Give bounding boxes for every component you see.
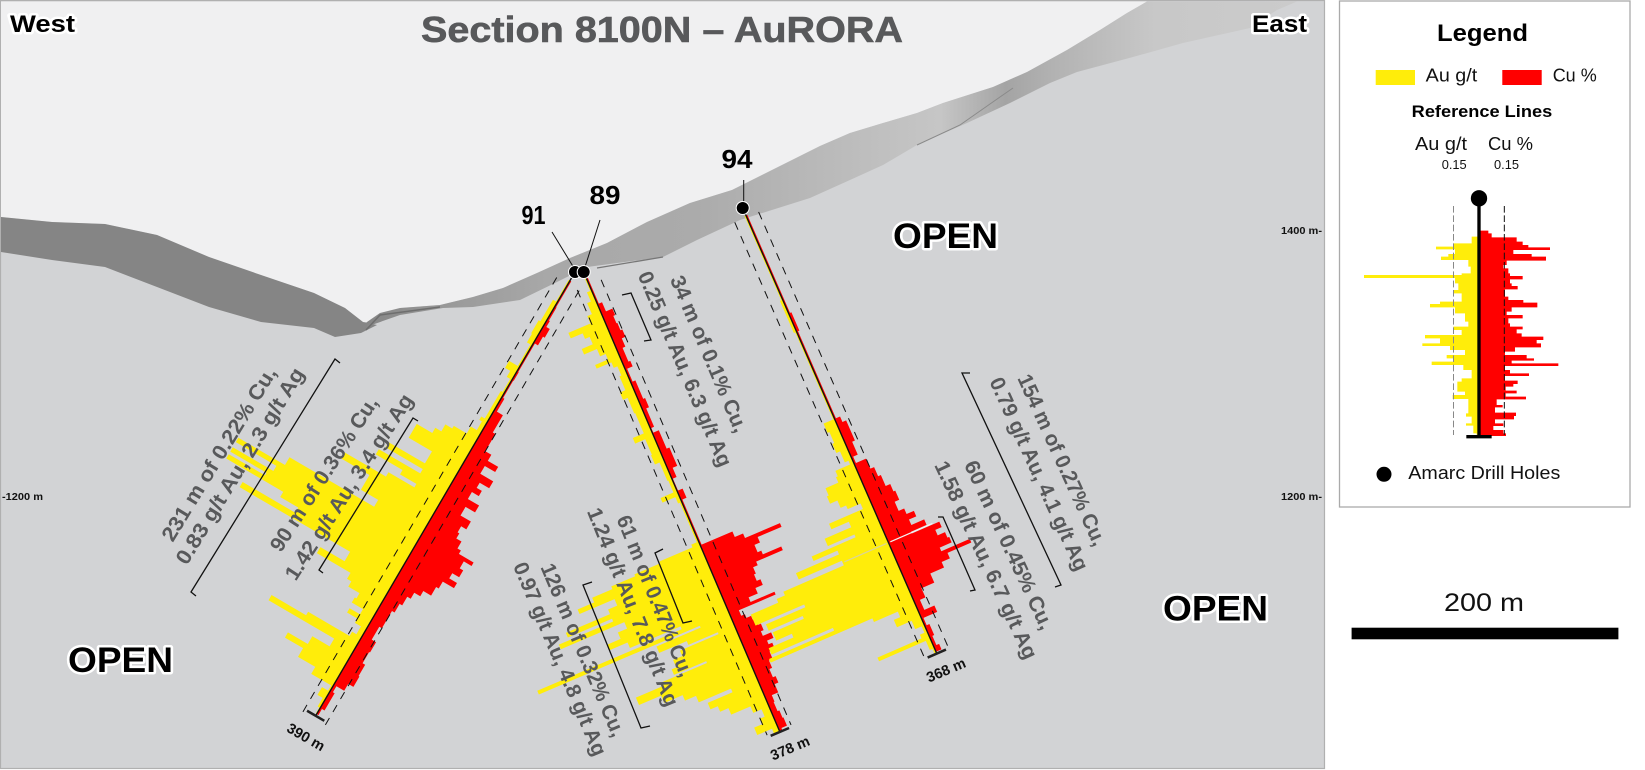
depth label 390 m: 390 m — [284, 721, 327, 755]
icon: drill hole marker — [1376, 467, 1392, 482]
bracket: 34 m interval — [622, 293, 651, 341]
callout: 154 m intercept: 154 m of 0.27% Cu, — [1013, 371, 1111, 550]
label: East: East — [1252, 11, 1307, 38]
terrain: east band — [360, 2, 1297, 331]
hole number 89: 89 — [590, 180, 620, 210]
hole 94 Au bars — [603, 215, 936, 715]
scale label: 200 m — [1444, 589, 1524, 617]
hole 91 Au bars — [138, 176, 570, 714]
hole 94 Cu bars — [746, 185, 1006, 652]
label: OPEN upper: OPEN — [893, 217, 998, 256]
hole collars and numbers — [522, 144, 753, 278]
reference lines heading: Reference Lines — [1412, 102, 1552, 121]
reference: Cu %: Cu % — [1488, 134, 1533, 154]
callout: 60 m intercept: 60 m of 0.45% Cu, — [959, 457, 1058, 633]
key text: Au g/t: Au g/t — [1426, 66, 1477, 86]
reference value Cu: 0.15 — [1494, 157, 1519, 172]
callout: 90 m intercept: 90 m of 0.36% Cu, — [266, 393, 383, 556]
hole 89 Cu bars — [586, 244, 855, 731]
callout: 154 m intercept: 0.79 g/t Au, 4.1 g/t Ag — [985, 374, 1093, 575]
depth label 378 m: 378 m — [768, 734, 812, 764]
callout: 34 m intercept: 0.25 g/t Au, 6.3 g/t Ag — [633, 268, 736, 470]
sky area — [1, 2, 1147, 322]
swatch: Au — [1376, 70, 1415, 85]
bracket: 90 m interval — [319, 418, 418, 573]
label: West: West — [10, 11, 75, 38]
callout: 90 m intercept: 1.42 g/t Au, 3.4 g/t Ag — [281, 390, 418, 585]
callout: 231 m intercept: 0.83 g/t Au, 2.3 g/t Ag — [172, 364, 309, 569]
reference value Au: 0.15 — [1442, 157, 1467, 172]
panel: legend — [1340, 1, 1630, 507]
bracket: 61 m interval — [655, 549, 692, 623]
key text: Amarc Drill Holes: Amarc Drill Holes — [1408, 463, 1560, 483]
reference: Au g/t: Au g/t — [1415, 134, 1467, 154]
bracket: 60 m interval — [938, 517, 975, 591]
hole number 91: 91 — [522, 200, 546, 230]
hole 89 Au bars — [395, 277, 779, 770]
callout: 126 m intercept: 0.97 g/t Au, 4.8 g/t Ag — [508, 559, 611, 759]
bracket: 126 m interval — [583, 582, 650, 728]
label: OPEN left: OPEN — [68, 641, 173, 680]
title: Section 8100N – AuRORA — [421, 9, 903, 50]
elevation label 1200 m right: 1200 m- — [1281, 492, 1322, 503]
terrain: west band — [1, 217, 377, 337]
drill hole 89 chart — [393, 240, 855, 770]
hole number 94: 94 — [722, 144, 753, 174]
callout: 61 m intercept: 61 m of 0.47% Cu, — [612, 512, 697, 680]
legend heading: Legend — [1437, 20, 1528, 47]
callout: 231 m intercept: 231 m of 0.22% Cu, — [157, 363, 281, 546]
key text: Cu %: Cu % — [1553, 66, 1597, 86]
callout: 60 m intercept: 1.58 g/t Au, 6.7 g/t Ag — [929, 457, 1042, 663]
drill hole 91 chart — [135, 168, 626, 749]
depth label 368 m: 368 m — [924, 656, 968, 686]
callout: 61 m intercept: 1.24 g/t Au, 7.8 g/t Ag — [582, 505, 683, 710]
swatch: Cu — [1502, 70, 1542, 85]
bracket: 154 m interval — [962, 373, 1061, 587]
scale bar — [1352, 589, 1618, 639]
hole 91 Cu bars — [317, 281, 621, 744]
label: OPEN right: OPEN — [1163, 590, 1268, 628]
elevation label 1400 m right: 1400 m- — [1281, 226, 1322, 237]
drill hole 94 chart — [600, 178, 1008, 720]
legend example hole chart — [1364, 190, 1558, 437]
elevation label 1200 m left: -1200 m — [2, 492, 43, 503]
callout: 34 m intercept: 34 m of 0.1% Cu, — [665, 272, 752, 436]
callout: 126 m intercept: 126 m of 0.32% Cu, — [536, 560, 629, 740]
bracket: 231 m interval — [191, 359, 340, 596]
